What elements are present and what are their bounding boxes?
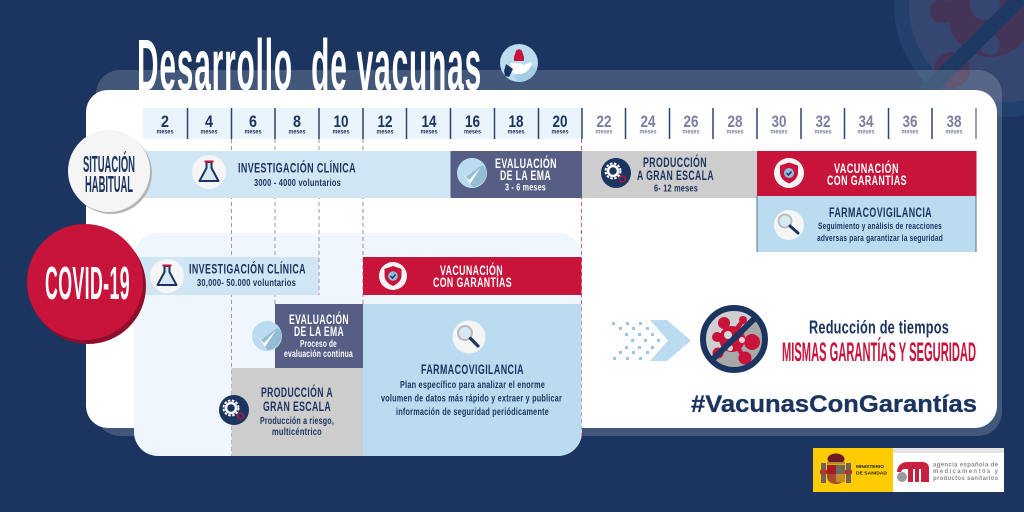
logos: ministerio de sanidad and AEMPS: MINISTERIO bbox=[856, 464, 884, 470]
timeline header: months: meses bbox=[200, 128, 218, 136]
icon: check bbox=[252, 321, 282, 351]
bar: farmacovigilancia (covid): Plan específico para analizar el enorme bbox=[400, 380, 545, 391]
timeline header: months: meses bbox=[814, 128, 832, 136]
bar: evaluacion de la EMA (covid) bbox=[252, 304, 363, 368]
bar: evaluacion de la EMA (covid): Proceso de bbox=[300, 339, 337, 350]
timeline header: months: 10 bbox=[334, 112, 348, 131]
icon: spanish coat of arms bbox=[820, 454, 852, 484]
timeline header: months: meses bbox=[640, 128, 657, 136]
timeline header: months: meses bbox=[376, 128, 394, 136]
timeline header: months: 38 bbox=[946, 112, 962, 131]
icon: flask bbox=[192, 155, 226, 189]
bar: vacunacion con garantias (covid): VACUNACIÓN bbox=[440, 263, 503, 278]
icon: gears bbox=[601, 158, 631, 188]
bar: produccion a gran escala (habitual) bbox=[582, 151, 757, 198]
bar: farmacovigilancia (habitual) bbox=[757, 196, 976, 252]
timeline header: months: 26 bbox=[684, 112, 698, 131]
logos: ministerio de sanidad and AEMPS bbox=[813, 448, 1004, 492]
text: COVID-19 bbox=[45, 257, 130, 309]
timeline header: months: 16 bbox=[465, 112, 480, 131]
bar: produccion a gran escala (covid) bbox=[219, 368, 363, 456]
timeline header: months bbox=[143, 108, 976, 139]
timeline header: months: 30 bbox=[772, 112, 786, 131]
timeline header: months: meses bbox=[596, 128, 613, 136]
timeline header: months: 8 bbox=[293, 112, 301, 131]
bar: investigacion clinica (habitual): 3000 - 4000 voluntarios bbox=[254, 178, 341, 189]
timeline header: months: meses bbox=[288, 128, 306, 136]
bar: vacunacion con garantias (covid): CON GARANTÍAS bbox=[433, 275, 512, 290]
bar: produccion a gran escala (habitual): PRODUCCIÓN bbox=[643, 155, 707, 170]
timeline header: months: 4 bbox=[205, 112, 213, 131]
timeline header: months: 22 bbox=[596, 112, 612, 131]
text: Desarrollo de vacunas bbox=[137, 26, 482, 106]
bar: produccion a gran escala (habitual): 6- 12 meses bbox=[654, 184, 698, 194]
timeline header: months: 28 bbox=[728, 112, 742, 131]
timeline header: months: meses bbox=[902, 128, 919, 136]
bar: farmacovigilancia (habitual): adversas para garantizar la seguridad bbox=[817, 233, 943, 244]
badge: situacion habitual: HABITUAL bbox=[85, 171, 133, 197]
decorative background crossed-out virus bbox=[894, 0, 1024, 117]
timeline header: months: meses bbox=[508, 128, 525, 136]
main white panel bbox=[86, 90, 997, 428]
icon: vaccine in hand bbox=[500, 44, 538, 82]
bar: produccion a gran escala (covid): Producción a riesgo, bbox=[260, 416, 334, 427]
timeline header: months: meses bbox=[420, 128, 438, 136]
timeline header: months: meses bbox=[682, 128, 700, 136]
bar: vacunacion con garantias (habitual) bbox=[757, 151, 976, 196]
panel: covid background bbox=[134, 233, 582, 456]
text: reduccion de tiempos: Reducción de tiempos bbox=[809, 318, 949, 338]
bar: farmacovigilancia (covid): FARMACOVIGILANCIA bbox=[421, 362, 524, 377]
logos: ministerio de sanidad and AEMPS: productos sanitarios bbox=[933, 476, 999, 482]
icon: magnifier bbox=[774, 210, 804, 240]
bar: produccion a gran escala (covid): PRODUCCIÓN A bbox=[261, 385, 333, 400]
timeline header: months: 32 bbox=[816, 112, 830, 131]
bar: vacunacion con garantias (habitual): VACUNACIÓN bbox=[834, 161, 899, 176]
bar: evaluacion de la EMA (covid): evaluación continua bbox=[284, 349, 353, 360]
bar: evaluacion de la EMA (habitual): 3 - 6 meses bbox=[505, 182, 546, 194]
timeline header: months: meses bbox=[156, 128, 174, 136]
bar: vacunacion con garantias (habitual): CON GARANTÍAS bbox=[827, 173, 907, 188]
timeline header: months: 24 bbox=[640, 112, 656, 131]
bar: investigacion clinica (habitual): INVESTIGACIÓN CLÍNICA bbox=[238, 160, 356, 176]
timeline header: months: meses bbox=[332, 128, 350, 136]
icon: magnifier bbox=[452, 320, 486, 354]
timeline header: months: 12 bbox=[378, 112, 392, 131]
timeline header: months: meses bbox=[858, 128, 875, 136]
icon: AEMPS logo bbox=[897, 462, 929, 482]
bar: investigacion clinica (covid): 30,000- 50.000 voluntarios bbox=[197, 278, 296, 289]
timeline header: months: meses bbox=[946, 128, 963, 136]
icon: shield bbox=[774, 158, 804, 188]
logos: ministerio de sanidad and AEMPS: agencia española de bbox=[933, 462, 999, 468]
back panel bbox=[96, 70, 1002, 436]
badge: situacion habitual bbox=[68, 130, 152, 214]
timeline header: months: 34 bbox=[858, 112, 874, 131]
timeline header: months: 20 bbox=[552, 112, 568, 131]
timeline header: months: 6 bbox=[249, 112, 257, 131]
bar: evaluacion de la EMA (covid): DE LA EMA bbox=[294, 324, 344, 339]
timeline header: months: 36 bbox=[902, 112, 918, 131]
logos: ministerio de sanidad and AEMPS: medicamentos y bbox=[933, 469, 999, 475]
timeline header: months: meses bbox=[770, 128, 788, 136]
bar: evaluacion de la EMA (habitual): EVALUACIÓN bbox=[495, 156, 557, 171]
icon: crossed-out virus bbox=[703, 308, 765, 370]
timeline header: months: 14 bbox=[422, 112, 437, 131]
timeline header: months: meses bbox=[726, 128, 744, 136]
bar: farmacovigilancia (covid): volumen de datos más rápido y extraer y publicar bbox=[381, 394, 562, 404]
bar: produccion a gran escala (habitual): A GRAN ESCALA bbox=[637, 168, 714, 183]
icon: gears bbox=[219, 395, 249, 425]
bar: produccion a gran escala (covid): multicéntrico bbox=[272, 427, 322, 438]
timeline header: months: 2 bbox=[161, 112, 169, 131]
bar: farmacovigilancia (habitual): FARMACOVIGILANCIA bbox=[829, 205, 932, 220]
bar: investigacion clinica (covid): INVESTIGACIÓN CLÍNICA bbox=[189, 262, 306, 276]
timeline header: months: 18 bbox=[508, 112, 524, 131]
bar: farmacovigilancia (covid) bbox=[363, 304, 582, 456]
timeline header: months: meses bbox=[244, 128, 262, 136]
timeline header: months: meses bbox=[552, 128, 569, 136]
bar: evaluacion de la EMA (habitual): DE LA EMA bbox=[500, 168, 551, 183]
badge: covid-19 bbox=[27, 224, 146, 344]
icon: shield bbox=[379, 262, 407, 290]
icon: flask bbox=[150, 259, 184, 293]
bar: evaluacion de la EMA (habitual) bbox=[450, 151, 582, 198]
bar: investigacion clinica (habitual) bbox=[143, 151, 450, 198]
bar: investigacion clinica (covid) bbox=[134, 257, 318, 295]
timeline header: months: meses bbox=[464, 128, 481, 136]
bar: evaluacion de la EMA (covid): EVALUACIÓN bbox=[289, 312, 349, 327]
hashtag: #VacunasConGarantías bbox=[691, 391, 977, 418]
logos: ministerio de sanidad and AEMPS: DE SANIDAD bbox=[856, 470, 888, 476]
arrow: dotted chevron bbox=[612, 320, 691, 361]
bar: vacunacion con garantias (covid) bbox=[363, 257, 582, 295]
badge: situacion habitual: SITUACIÓN bbox=[83, 150, 135, 177]
bar: farmacovigilancia (habitual): Seguimiento y análisis de reacciones bbox=[818, 221, 942, 232]
icon: check bbox=[457, 158, 487, 188]
bar: farmacovigilancia (covid): información de seguridad periódicamente bbox=[396, 407, 549, 418]
bar: produccion a gran escala (covid): GRAN ESCALA bbox=[263, 399, 331, 414]
